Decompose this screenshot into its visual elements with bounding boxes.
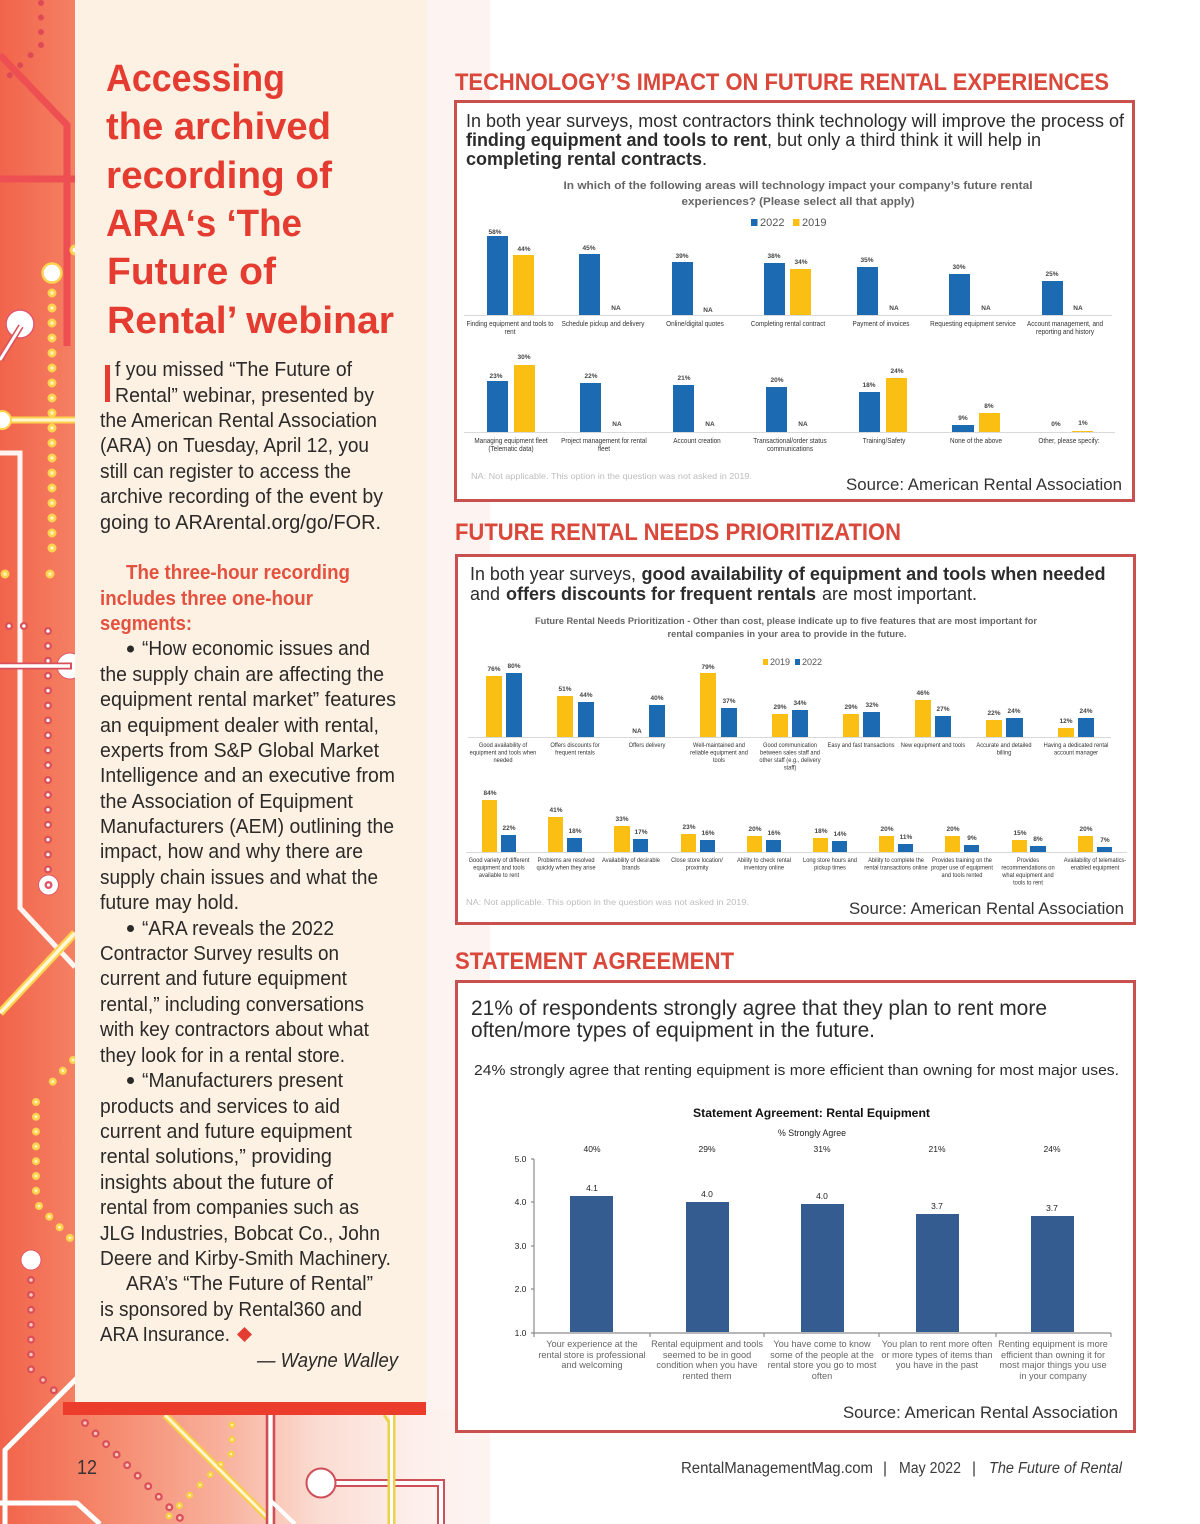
bar values: 3.7 [931, 1201, 943, 1211]
axis labels: 3.0 [515, 1241, 527, 1251]
panel summary text [470, 564, 1106, 604]
bar chart: needs, row 2: 20% [1079, 826, 1093, 833]
chart title [535, 616, 1037, 640]
chart legend: 2019 [770, 657, 790, 667]
bar chart: needs, row 2: 16% [701, 830, 715, 837]
article bullet list and closing: an equipment dealer with rental, [100, 715, 379, 737]
source credit: Source: American Rental Association [849, 899, 1124, 918]
byline: — Wayne Walley [256, 1350, 399, 1372]
article intro paragraph: f you missed “The Future of [115, 359, 352, 381]
article bullet list and closing: ARA’s “The Future of Rental” [126, 1273, 373, 1295]
bar chart: needs, row 1: 24% [1079, 708, 1093, 715]
bar chart: needs, row 2: Close store location/ [671, 857, 723, 864]
category labels: in your company [1019, 1371, 1087, 1381]
bar chart: needs, row 1: 40% [650, 695, 664, 702]
bar chart: needs, row 1: Accurate and detailed [976, 742, 1032, 749]
category labels: rental store you go to most [768, 1360, 877, 1370]
note: not applicable: NA: Not applicable. This option in the question was not asked in 2019. [466, 897, 749, 907]
bar chart: needs, row 2: brands [622, 864, 640, 872]
article subheading [100, 562, 350, 635]
chart title: In which of the following areas will technology impact your company’s future rental [564, 180, 1032, 192]
bar chart: needs, row 1: 27% [936, 706, 950, 713]
article intro paragraph: (ARA) on Tuesday, April 12, you [100, 435, 369, 457]
article bullet list and closing: insights about the future of [100, 1172, 333, 1194]
panel: future rental needs [456, 556, 1134, 924]
background: pale page band [426, 0, 490, 1524]
bar chart: technology, row 1: Online/digital quotes [666, 321, 724, 328]
bar chart: needs, row 2: Ability to complete the [868, 857, 924, 864]
bar chart: needs, row 2: what equipment and [1001, 872, 1054, 879]
background: coral left strip [0, 0, 75, 1524]
bar chart: needs, row 1: Good availability of [479, 742, 527, 749]
article bullet list and closing: ARA Insurance. [100, 1324, 230, 1346]
article title: Accessing [106, 58, 285, 100]
bar chart: needs, row 1: 32% [865, 702, 879, 709]
bar chart: technology, row 1: Finding equipment and tools to [466, 321, 554, 328]
bar chart: technology, row 1: 25% [1045, 271, 1059, 278]
chart title: Future Rental Needs Prioritization - Other than cost, please indicate up to five features that are most important for [535, 616, 1037, 627]
bar chart: technology, row 2: (Telematic data) [488, 446, 534, 453]
footer: RentalManagementMag.com [681, 1460, 873, 1477]
panel summary text: good availability of equipment and tools when needed [642, 564, 1106, 584]
category labels: Your experience at the [546, 1339, 638, 1349]
bar chart: needs, row 2: Availability of telematics- [1064, 857, 1126, 864]
background: coral bottom band [0, 1410, 490, 1524]
axis labels: 5.0 [515, 1154, 527, 1164]
bar chart: statement agreement [515, 1144, 1111, 1381]
panel summary text [471, 997, 1119, 1079]
bar chart: technology, row 1: 39% [675, 253, 689, 260]
panel summary text: 24% strongly agree that renting equipment is more efficient than owning for most major uses. [474, 1062, 1119, 1079]
bar chart: technology, row 2: 30% [517, 354, 531, 361]
bar chart: technology, row 1: 58% [488, 229, 502, 236]
bar chart: needs, row 1 [468, 663, 1111, 772]
bar chart: technology, row 2: Account creation [673, 438, 721, 445]
percent strongly agree row: 29% [698, 1144, 716, 1154]
bar chart: technology, row 1: Payment of invoices [852, 321, 910, 328]
bar chart: needs, row 2: recommendations on [1001, 864, 1055, 872]
bar chart: technology, row 1: 38% [767, 253, 781, 260]
article bullet list and closing: impact, how and why there are [100, 841, 363, 863]
article bullet list and closing: rental from companies such as [100, 1197, 359, 1219]
category labels: and welcoming [561, 1360, 623, 1370]
bar chart: needs, row 2: 9% [967, 835, 977, 842]
bar values: 4.1 [586, 1183, 598, 1193]
chart title: rental companies in your area to provide in the future. [668, 629, 906, 640]
bar chart: needs, row 1: Well-maintained and [693, 742, 745, 749]
category labels: seemed to be in good [663, 1350, 751, 1360]
article bullet list and closing: Intelligence and an executive from [100, 765, 395, 787]
bar chart: needs, row 2: 8% [1033, 836, 1043, 843]
category labels: You have come to know [773, 1339, 871, 1349]
bar chart: needs, row 2: tools to rent [1013, 879, 1043, 887]
bar chart: needs, row 2: 16% [767, 830, 781, 837]
bar chart: needs, row 1: 51% [558, 686, 572, 693]
bar chart: technology, row 2: 9% [958, 415, 968, 422]
bar chart: technology, row 2: 24% [890, 368, 904, 375]
bar chart: needs, row 2: 84% [483, 790, 497, 797]
percent strongly agree row: 40% [583, 1144, 601, 1154]
article intro paragraph: Rental” webinar, presented by [115, 385, 374, 407]
bar chart: needs, row 2: and tools rented [942, 872, 982, 879]
article title: ARA‘s ‘The [106, 203, 302, 245]
cream article panel [75, 0, 426, 1402]
bar chart: needs, row 1: Offers delivery [629, 742, 666, 749]
bar chart: needs, row 1: Having a dedicated rental [1044, 742, 1108, 749]
category labels: condition when you have [656, 1360, 758, 1370]
chart title: experiences? (Please select all that apply) [682, 196, 915, 208]
panel summary text: often/more types of equipment in the future. [471, 1019, 875, 1042]
article bullet list and closing: they look for in a rental store. [100, 1045, 345, 1067]
article bullet list and closing: Contractor Survey results on [100, 943, 339, 965]
bar chart: technology, row 2: 21% [677, 375, 691, 382]
bar chart: technology, row 1: Completing rental contract [751, 321, 825, 328]
bar chart: needs, row 1: account manager [1054, 749, 1098, 757]
panel summary text: , but only a third think it will help in [767, 130, 1041, 150]
bar chart: needs, row 1: 29% [773, 704, 787, 711]
bar chart: needs, row 2: 20% [880, 826, 894, 833]
chart title: % Strongly Agree [778, 1128, 846, 1139]
bar chart: needs, row 2: rental transactions online [864, 864, 928, 872]
article bullet list and closing [99, 638, 396, 1346]
category labels: or more types of items than [881, 1350, 993, 1360]
bar chart: technology, row 2: 22% [584, 373, 598, 380]
bar chart: technology, row 2: 20% [770, 377, 784, 384]
chart title: Statement Agreement: Rental Equipment [693, 1106, 930, 1120]
article bullet list and closing: equipment rental market” features [100, 689, 396, 711]
panel summary text: finding equipment and tools to rent [466, 130, 767, 150]
bar chart: needs, row 2: 20% [748, 826, 762, 833]
panel: statement agreement [456, 982, 1134, 1432]
bar chart: technology, row 2: 0% [1051, 421, 1061, 428]
article bullet list and closing: rental,” including conversations [100, 994, 364, 1016]
panel summary text: . [702, 149, 707, 169]
bar chart: technology, row 1: NA [703, 307, 713, 314]
bar chart: technology, row 2: fleet [598, 446, 610, 453]
bar chart: needs, row 1: frequent rentals [555, 749, 595, 757]
article subheading: includes three one-hour [100, 588, 313, 610]
axis labels: 2.0 [515, 1284, 527, 1294]
article intro paragraph: archive recording of the event by [100, 486, 383, 508]
bar chart: needs, row 2: 17% [634, 829, 648, 836]
bar chart: needs, row 2: 15% [1013, 830, 1027, 837]
category labels: often [812, 1371, 832, 1381]
panel summary text: offers discounts for frequent rentals [506, 584, 816, 604]
bar chart: technology, row 2: NA [705, 421, 715, 428]
bar chart: needs, row 2: equipment and tools [473, 864, 525, 872]
article bullet list and closing: with key contractors about what [99, 1019, 369, 1041]
bar chart: technology, row 1: 44% [517, 246, 531, 253]
category labels: some of the people at the [770, 1350, 874, 1360]
bar chart: technology, row 1 [464, 229, 1112, 336]
axis labels: 1.0 [515, 1328, 527, 1338]
circuit line artwork [0, 3, 441, 1524]
bar chart: needs, row 2: available to rent [479, 872, 519, 879]
percent strongly agree row: 21% [928, 1144, 946, 1154]
bar chart: needs, row 1: Easy and fast transactions [828, 742, 894, 749]
bar chart: needs, row 1: 44% [579, 692, 593, 699]
bar chart: technology, row 1: 45% [582, 245, 596, 252]
bar chart: needs, row 1: Offers discounts for [550, 742, 600, 749]
bar chart: needs, row 1: 80% [507, 663, 521, 670]
bar values: 3.7 [1046, 1203, 1058, 1213]
source credit: Source: American Rental Association [846, 475, 1122, 494]
bar chart: technology, row 2: 8% [984, 403, 994, 410]
panel summary text: In both year surveys, most contractors think technology will improve the process of [466, 111, 1125, 131]
bar chart: technology, row 2: Other, please specify: [1038, 438, 1100, 445]
bar chart: technology, row 1: 35% [860, 257, 874, 264]
bar chart: technology, row 2: 1% [1078, 420, 1088, 427]
article subheading: segments: [100, 613, 192, 635]
footer: The Future of Rental [989, 1460, 1123, 1477]
bar chart: needs, row 2: enabled equipment [1071, 864, 1120, 872]
axis labels: 4.0 [515, 1197, 527, 1207]
drop cap: I [100, 354, 115, 414]
article bullet list and closing: is sponsored by Rental360 and [100, 1299, 362, 1321]
bar chart: technology, row 2: Managing equipment fleet [474, 438, 548, 445]
bar chart: needs, row 1: equipment and tools when [470, 749, 536, 757]
bar chart: needs, row 1: 46% [916, 690, 930, 697]
article bullet list and closing: rental solutions,” providing [100, 1146, 332, 1168]
category labels: you have in the past [896, 1360, 979, 1370]
bar chart: needs, row 2: Problems are resolved [537, 857, 595, 864]
bar chart: technology, row 2: Training/Safety [863, 438, 906, 445]
bar chart: needs, row 1: between sales staff and [760, 749, 820, 757]
article bullet list and closing: the Association of Equipment [100, 791, 353, 813]
percent strongly agree row: 31% [813, 1144, 831, 1154]
bar chart: needs, row 2: quickly when they arise [536, 864, 596, 872]
panel summary text: are most important. [822, 584, 977, 604]
bar chart: needs, row 1: staff) [784, 764, 796, 772]
category labels: Rental equipment and tools [651, 1339, 763, 1349]
bar chart: technology, row 1: Requesting equipment service [930, 321, 1016, 328]
source credit: Source: American Rental Association [843, 1403, 1118, 1422]
category labels: efficient than owning it for [1001, 1350, 1105, 1360]
bar chart: needs, row 2: 22% [502, 825, 516, 832]
article bullet list and closing: experts from S&P Global Market [100, 740, 379, 762]
page number: 12 [77, 1457, 97, 1479]
category labels [538, 1339, 1108, 1381]
bar chart: technology, row 1: 34% [794, 259, 808, 266]
bar chart: technology, row 2: Project management for rental [561, 438, 647, 445]
bar chart: technology, row 1: NA [981, 305, 991, 312]
footer [681, 1460, 1123, 1477]
article bullet list and closing: “How economic issues and [142, 638, 370, 660]
bar chart: technology, row 1: NA [1073, 305, 1083, 312]
percent strongly agree row: 24% [1043, 1144, 1061, 1154]
red rule under article [63, 1402, 426, 1415]
bar chart: technology, row 1: NA [889, 305, 899, 312]
article subheading: The three-hour recording [126, 562, 350, 584]
bar values: 4.0 [701, 1189, 713, 1199]
bar chart: needs, row 1: 79% [701, 664, 715, 671]
bar chart: technology, row 2 [464, 354, 1115, 453]
bar chart: needs, row 1: tools [713, 757, 725, 764]
bar chart: technology, row 2: NA [798, 421, 808, 428]
bar chart: needs, row 2: 33% [615, 816, 629, 823]
footer: May 2022 [899, 1460, 961, 1477]
bar chart: needs, row 1: Good communication [763, 742, 817, 749]
article intro paragraph: the American Rental Association [100, 410, 377, 432]
heading: statement agreement: STATEMENT AGREEMENT [455, 948, 734, 975]
panel summary text: 21% of respondents strongly agree that they plan to rent more [471, 997, 1047, 1020]
category labels: You plan to rent more often [882, 1339, 992, 1349]
article bullet list and closing: “Manufacturers present [142, 1070, 343, 1092]
footer: | [883, 1460, 887, 1477]
bar chart: needs, row 2: Ability to check rental [737, 857, 791, 864]
category labels: rental store is professional [538, 1350, 646, 1360]
article bullet list and closing: Manufacturers (AEM) outlining the [100, 816, 394, 838]
bar chart: technology, row 2: None of the above [950, 438, 1002, 445]
bar chart: needs, row 1: reliable equipment and [690, 749, 748, 757]
chart legend: 2022 [802, 657, 822, 667]
article bullet list and closing: current and future equipment [100, 1121, 352, 1143]
percent strongly agree row [583, 1144, 1061, 1154]
bar chart: technology, row 1: Schedule pickup and delivery [562, 321, 645, 328]
bar chart: needs, row 1: New equipment and tools [901, 742, 965, 749]
bar chart: needs, row 2: Provides training on the [932, 857, 993, 864]
article intro paragraph [100, 354, 383, 534]
panel summary text: completing rental contracts [466, 149, 702, 169]
bar chart: technology, row 2: Transactional/order status [753, 438, 827, 445]
bar chart: technology, row 2: 23% [489, 373, 503, 380]
article bullet list and closing: Deere and Kirby-Smith Machinery. [100, 1248, 391, 1270]
article title [106, 58, 394, 342]
panel summary text: and [470, 584, 500, 604]
bar chart: needs, row 1: 76% [487, 666, 501, 673]
article bullet list and closing: JLG Industries, Bobcat Co., John [100, 1223, 380, 1245]
bar chart: needs, row 2: 20% [946, 826, 960, 833]
bar chart: needs, row 2: proper use of equipment [931, 864, 993, 872]
bar chart: needs, row 2: 14% [833, 831, 847, 838]
bar values [586, 1183, 1058, 1213]
category labels: rented them [682, 1371, 732, 1381]
chart legend [751, 217, 826, 229]
bar chart: technology, row 2: communications [767, 446, 813, 453]
bar chart: needs, row 2: pickup times [814, 864, 846, 872]
article intro paragraph: still can register to access the [100, 461, 351, 483]
bar chart: needs, row 1: 24% [1007, 708, 1021, 715]
bar chart: needs, row 2: inventory online [744, 864, 785, 872]
panel: technology impact [456, 102, 1134, 500]
bar chart: needs, row 2: 7% [1100, 837, 1110, 844]
chart legend [763, 657, 822, 667]
bar chart: needs, row 1: 12% [1059, 718, 1073, 725]
bar chart: needs, row 2: 11% [900, 834, 913, 841]
bar chart: needs, row 2: Good variety of different [469, 857, 530, 864]
note: not applicable: NA: Not applicable. This option in the question was not asked in 2019. [471, 471, 752, 481]
article bullet list and closing: the supply chain are affecting the [100, 664, 384, 686]
bar chart: needs, row 2: proximity [686, 864, 709, 872]
bar chart: technology, row 1: 30% [952, 264, 966, 271]
icon: end-of-article diamond [237, 1327, 252, 1342]
bar values: 4.0 [816, 1191, 828, 1201]
chart title [564, 180, 1032, 208]
article bullet list and closing: supply chain issues and what the [100, 867, 378, 889]
bar chart: needs, row 1: 22% [987, 710, 1001, 717]
bar chart: technology, row 1: NA [611, 305, 621, 312]
bar chart: needs, row 2: 18% [814, 828, 828, 835]
bar chart: needs, row 2 [466, 790, 1127, 887]
bar chart: needs, row 2: 41% [549, 807, 563, 814]
bar chart: needs, row 2: Availability of desirable [602, 857, 661, 864]
chart legend: 2019 [802, 217, 826, 229]
bar chart: needs, row 2: Provides [1017, 857, 1039, 864]
bar chart: technology, row 1: reporting and history [1036, 329, 1095, 336]
heading: future rental needs: FUTURE RENTAL NEEDS PRIORITIZATION [455, 519, 901, 546]
bar chart: needs, row 1: needed [493, 757, 513, 764]
article title: Rental’ webinar [107, 300, 394, 342]
bar chart: needs, row 1: 34% [793, 700, 807, 707]
bar chart: needs, row 1: NA [632, 728, 642, 735]
article bullet list and closing: current and future equipment [100, 968, 347, 990]
bar chart: needs, row 2: Long store hours and [803, 857, 857, 864]
chart title [693, 1106, 930, 1139]
article intro paragraph: going to ARArental.org/go/FOR. [100, 512, 381, 534]
bar chart: technology, row 2: NA [612, 421, 622, 428]
footer: | [972, 1460, 976, 1477]
bar chart: needs, row 2: 18% [568, 828, 582, 835]
bar chart: needs, row 1: other staff (e.g., delivery [759, 757, 821, 764]
axis labels [515, 1154, 527, 1338]
bar chart: needs, row 1: billing [997, 749, 1011, 757]
panel summary text: In both year surveys, [470, 564, 636, 584]
category labels: most major things you use [999, 1360, 1107, 1370]
article title: the archived [106, 106, 331, 148]
chart legend: 2022 [760, 217, 784, 229]
bar chart: needs, row 2: 23% [682, 824, 696, 831]
article title: Future of [107, 251, 276, 293]
heading: technology: TECHNOLOGY’S IMPACT ON FUTURE RENTAL EXPERIENCES [455, 69, 1109, 96]
bar chart: needs, row 1: 29% [844, 704, 858, 711]
bar chart: needs, row 1: 37% [722, 698, 736, 705]
category labels: Renting equipment is more [998, 1339, 1108, 1349]
panel summary text [466, 111, 1125, 169]
article bullet list and closing: future may hold. [100, 892, 239, 914]
bar chart: technology, row 1: Account management, and [1027, 321, 1103, 328]
bar chart: technology, row 2: 18% [862, 382, 876, 389]
article bullet list and closing: products and services to aid [100, 1096, 340, 1118]
article title: recording of [106, 155, 332, 197]
article bullet list and closing: “ARA reveals the 2022 [142, 918, 334, 940]
bar chart: technology, row 1: rent [505, 329, 516, 336]
